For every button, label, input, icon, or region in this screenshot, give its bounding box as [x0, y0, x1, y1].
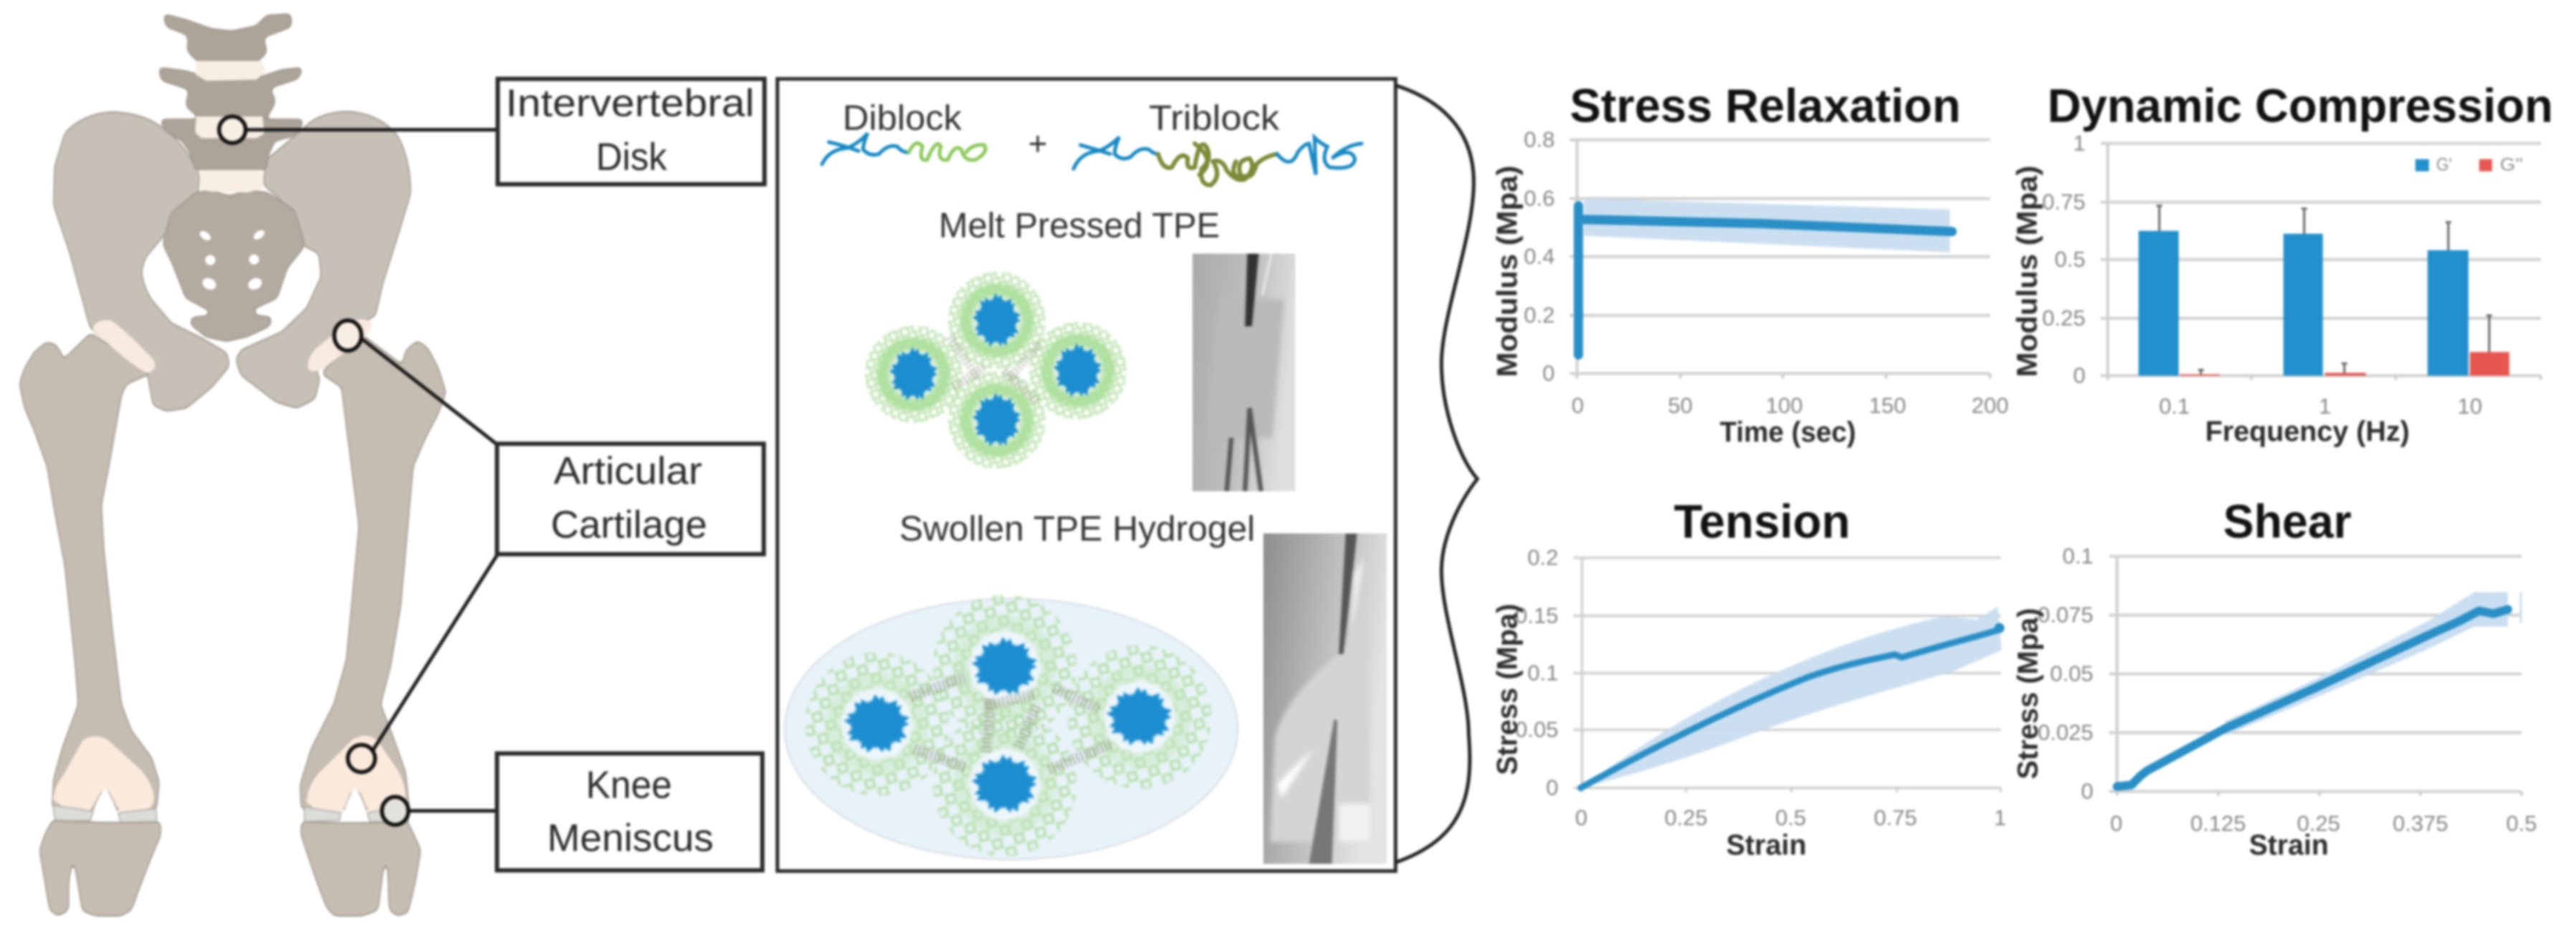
y axis ticks: 0.75: [2042, 189, 2085, 214]
x axis title: Strain: [2249, 829, 2329, 861]
legend: G': [2436, 155, 2452, 175]
knee menisci: [53, 804, 409, 823]
x axis title: Time (sec): [1720, 417, 1856, 448]
melt pressed micelle network: [865, 272, 1127, 469]
y axis ticks: [1515, 545, 1558, 800]
y axis ticks: 0.05: [2050, 661, 2093, 686]
y axis title: Modulus (Mpa): [2012, 166, 2043, 377]
label box: Knee Meniscus: Knee: [586, 764, 672, 807]
label box: Knee Meniscus: [497, 753, 762, 870]
y axis ticks: 0.2: [1528, 545, 1558, 570]
x axis title: Frequency (Hz): [2205, 416, 2410, 447]
y axis ticks: 0.8: [1524, 127, 1555, 152]
marker circle: hip cartilage: [334, 320, 361, 351]
left hip bone: [55, 113, 229, 410]
x axis ticks: 0.5: [1775, 805, 1806, 830]
chart title: Shear: [2223, 495, 2352, 548]
x axis ticks: [2159, 394, 2482, 419]
intervertebral discs: [195, 61, 265, 193]
marker circle: intervertebral disk: [219, 116, 245, 143]
x axis ticks: 0.1: [2159, 394, 2190, 419]
y axis ticks: 0: [2073, 363, 2085, 388]
photo: melt pressed sample: [1193, 254, 1295, 491]
y axis ticks: 0.25: [2042, 305, 2085, 331]
label box: Articular Cartilage: Articular: [554, 450, 702, 493]
label box: Articular Cartilage: Cartilage: [551, 503, 707, 546]
x axis ticks: 1: [1994, 805, 2007, 830]
chart: Tension: [1492, 495, 2007, 861]
plus sign: +: [1028, 125, 1047, 162]
leader lines: [246, 130, 498, 811]
error band: [2225, 592, 2508, 736]
x axis ticks: 0.375: [2392, 811, 2448, 836]
legend: G'': [2500, 155, 2523, 175]
swollen hydrogel network: [785, 595, 1238, 860]
x axis ticks: 0.125: [2190, 811, 2246, 836]
x axis ticks: 50: [1668, 393, 1692, 418]
x axis ticks: [1575, 805, 2007, 830]
end marker: [1994, 623, 2004, 633]
y axis title: Modulus (Mpa): [1492, 166, 1523, 377]
chart: Shear: [2012, 495, 2537, 861]
y axis ticks: 0.075: [2037, 602, 2093, 627]
x axis ticks: 0.5: [2506, 811, 2537, 836]
x axis ticks: 150: [1869, 393, 1906, 418]
curly brace: [1396, 85, 1477, 862]
x axis ticks: 100: [1766, 393, 1803, 418]
error band: [1584, 199, 1950, 252]
heading: Triblock: Triblock: [1149, 99, 1280, 138]
y axis ticks: 0.05: [1515, 717, 1558, 742]
label box: Intervertebral Disk: [498, 79, 764, 184]
marker circle: knee cartilage: [348, 745, 375, 772]
diblock polymer chain: [822, 133, 985, 164]
lumbar vertebrae: [159, 15, 304, 168]
y axis ticks: 0.15: [1515, 603, 1558, 628]
right femur: [300, 336, 445, 809]
chart: Dynamic Compression: [2012, 79, 2553, 447]
y axis ticks: 0.5: [2055, 247, 2085, 272]
y axis ticks: 0.2: [1524, 303, 1555, 328]
central panel: TPE structure: [777, 79, 1396, 871]
label box: Intervertebral Disk: Disk: [596, 135, 668, 179]
data line: [1581, 629, 2000, 788]
y axis ticks: 0: [1543, 361, 1555, 386]
gridlines and axes: [2109, 556, 2521, 796]
error bars: [2156, 206, 2492, 376]
knee notches: [90, 788, 370, 822]
heading: Melt Pressed TPE: Melt Pressed TPE: [939, 206, 1220, 245]
right tibia and fibula: [302, 823, 420, 915]
x axis ticks: 1: [2319, 394, 2331, 419]
gridlines and axes: [1570, 140, 1990, 379]
heading: Swollen TPE Hydrogel: Swollen TPE Hydrogel: [899, 510, 1255, 548]
label box: Articular Cartilage: [497, 444, 764, 554]
x axis title: Strain: [1726, 829, 1806, 861]
x axis ticks: 0.25: [2297, 811, 2340, 836]
y axis ticks: 0.4: [1524, 244, 1555, 269]
sacrum: [164, 191, 304, 341]
y axis ticks: 0: [1546, 775, 1558, 800]
gridlines and axes: [2101, 143, 2541, 380]
hip cartilage: [93, 320, 372, 373]
y axis ticks: 0.6: [1524, 186, 1555, 211]
bars G double prime: [2180, 352, 2509, 376]
legend: [2415, 155, 2523, 175]
photo: swollen hydrogel sample: [1264, 533, 1387, 864]
x axis ticks: 0.75: [1874, 805, 1917, 830]
label box: Knee Meniscus: Meniscus: [547, 817, 714, 860]
gridlines and axes: [1573, 558, 2001, 792]
marker circle: knee meniscus: [382, 797, 409, 824]
y axis title: Stress (Mpa): [2012, 608, 2044, 779]
heading: Diblock: Diblock: [843, 99, 962, 138]
label box: Intervertebral Disk: Intervertebral: [506, 82, 754, 125]
chart title: Stress Relaxation: [1570, 79, 1961, 132]
left tibia and fibula: [40, 822, 160, 915]
skeleton illustration: pelvis and legs: [20, 15, 445, 915]
y axis title: Stress (Mpa): [1492, 604, 1523, 775]
x axis ticks: 200: [1971, 393, 2009, 418]
y axis ticks: [1524, 127, 1555, 386]
y axis ticks: 0.1: [2063, 543, 2093, 569]
data line: [2117, 609, 2508, 786]
x axis ticks: 0.25: [1665, 805, 1708, 830]
x axis ticks: 0: [2110, 811, 2123, 836]
y axis ticks: 0.1: [1528, 660, 1558, 685]
chart title: Dynamic Compression: [2047, 79, 2553, 132]
y axis ticks: 0: [2081, 779, 2093, 804]
x axis ticks: 0: [1575, 805, 1588, 830]
y axis ticks: 0.025: [2037, 720, 2093, 745]
stray error bar: [2520, 592, 2521, 623]
error band: [1581, 607, 2002, 788]
chart: Stress Relaxation: [1492, 79, 2009, 448]
knee cartilage: [53, 736, 405, 814]
right hip bone: [237, 113, 410, 407]
x axis ticks: 10: [2458, 394, 2482, 419]
x axis ticks: [1571, 393, 2009, 418]
data line: [1578, 206, 1952, 355]
triblock polymer chain: [1074, 137, 1362, 185]
y axis ticks: [2042, 130, 2085, 388]
chart title: Tension: [1674, 495, 1850, 548]
x axis ticks: 0: [1571, 393, 1584, 418]
left femur: [20, 334, 158, 809]
y axis ticks: 1: [2073, 130, 2085, 156]
bars G prime: [2139, 231, 2468, 376]
x axis ticks: [2110, 811, 2537, 836]
y axis ticks: [2037, 543, 2093, 804]
